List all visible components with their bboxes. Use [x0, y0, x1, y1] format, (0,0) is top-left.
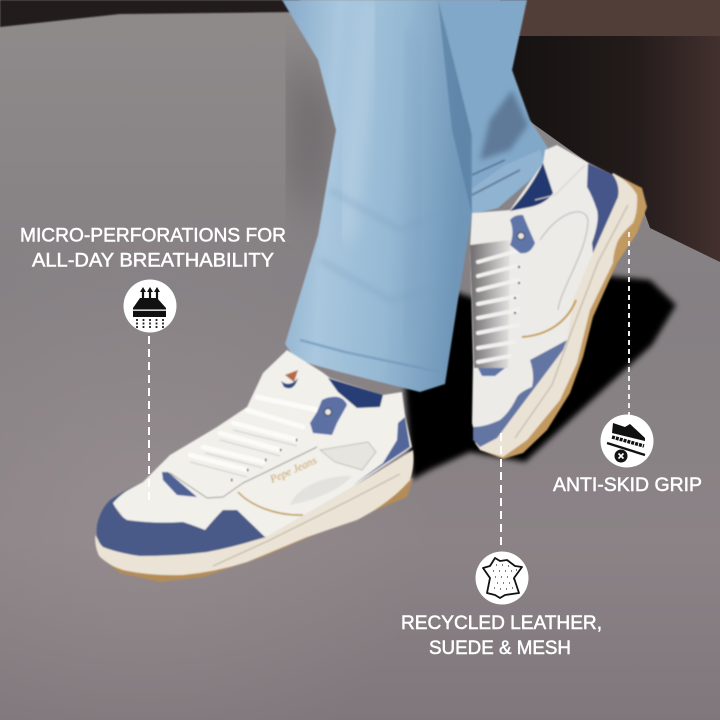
cream midsole	[475, 173, 637, 457]
gum outsole	[98, 478, 413, 582]
dashed connector: grip	[628, 232, 630, 415]
dashed connector: leather	[500, 433, 502, 548]
laces	[190, 397, 327, 470]
eyelets	[515, 266, 519, 314]
heading: recycled leather	[401, 613, 602, 659]
mesh panel	[320, 442, 376, 470]
heading: micro-perforations: ALL-DAY BREATHABILITY	[32, 250, 274, 272]
blue eyelet panel	[310, 397, 347, 435]
rear trouser leg	[440, 0, 548, 215]
blue suede toe panel	[97, 482, 265, 556]
right shoe	[470, 145, 647, 459]
icon: leather hide	[476, 552, 528, 604]
blue heel panel	[587, 163, 618, 253]
jeans	[282, 0, 548, 392]
blue toe slit	[162, 472, 197, 497]
heading: recycled leather: SUEDE & MESH	[429, 638, 571, 659]
gold piping	[522, 300, 576, 337]
heading: micro-perforations	[20, 226, 286, 272]
lace shadow zone	[470, 240, 510, 368]
eyelets	[231, 440, 298, 480]
white leather upper	[110, 350, 412, 537]
blue suede toe panel	[473, 340, 567, 447]
tongue logo	[281, 370, 298, 388]
dashed connector: perforations	[148, 336, 150, 501]
laces	[478, 250, 520, 362]
blue eyelet panel	[510, 215, 535, 253]
icon: anti-skid shoe	[600, 414, 654, 468]
cream midsole	[95, 450, 414, 575]
heading: anti-skid grip: ANTI-SKID GRIP	[553, 475, 702, 496]
icon: breathable layers	[124, 280, 176, 332]
heading: micro-perforations: MICRO-PERFORATIONS FOR	[20, 226, 286, 246]
blue mesh heel panel	[353, 417, 410, 485]
left shoe	[95, 350, 414, 582]
floor shadow under shoes	[405, 275, 676, 480]
sock	[510, 163, 553, 211]
sock	[328, 378, 383, 408]
lace panel outline	[170, 447, 317, 498]
heading: recycled leather: RECYCLED LEATHER,	[401, 613, 602, 634]
white leather upper	[470, 145, 618, 445]
gum outsole	[480, 173, 647, 459]
front trouser leg	[282, 0, 472, 392]
brand script: Pepe Jeans	[267, 455, 319, 486]
small blue toe slit	[478, 368, 505, 376]
gold piping	[238, 492, 303, 515]
